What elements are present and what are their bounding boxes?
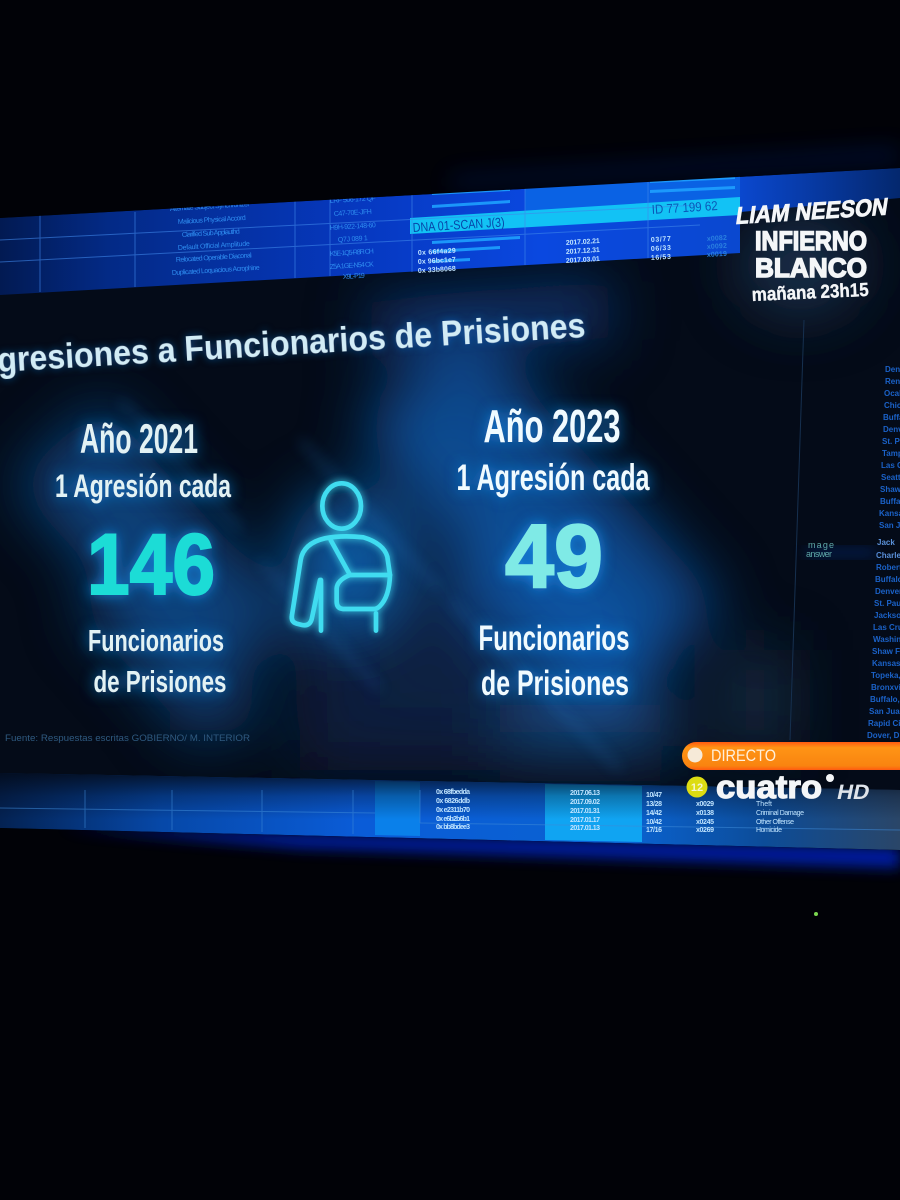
panel: bottom data band: 2017.06.13 (570, 790, 600, 797)
panel: top data band: Z5A 1GE-N54 CK (330, 261, 374, 271)
program promo: Liam Neeson: mañana 23h15 (751, 280, 869, 306)
label 2023: Funcionarios (478, 619, 630, 658)
year 2021: Año 2021 (80, 415, 198, 462)
panel: bottom data band: Criminal Damage (756, 810, 804, 817)
age rating badge: 12 (691, 782, 703, 794)
program promo: Liam Neeson: BLANCO (755, 253, 867, 283)
column: año 2023 (456, 400, 650, 703)
panel: top data band: 0x 96bc1e7 (418, 257, 456, 266)
panel: top data band: 2017.12.31 (566, 247, 600, 256)
panel: top data band: Default Official Amplitude (178, 241, 250, 252)
standby light (814, 912, 818, 916)
scan label: DNA 01-SCAN J(3) (412, 214, 505, 235)
screen glow on the surrounding wall (60, 150, 900, 868)
panel: bottom data band: Other Offense (756, 819, 794, 826)
column: año 2021 (55, 415, 231, 699)
panel: top data band: x0019 (707, 251, 727, 259)
sublabel 2021: de Prisiones (94, 664, 226, 699)
panel: right data column (790, 320, 900, 740)
panel: bottom data band: 2017.01.17 (570, 817, 600, 824)
panel: bottom data band: x0138 (696, 810, 714, 817)
panel: bottom data band: 10/47 (646, 792, 662, 799)
panel: bottom data band: 2017.01.13 (570, 825, 600, 832)
channel logo: cuatro HD: HD (835, 781, 872, 804)
light streaks (120, 400, 620, 770)
panel: bottom data band: 13/28 (646, 801, 662, 808)
year 2023: Año 2023 (484, 400, 620, 452)
panel: top data band: Clarified Sub Applauthd (182, 228, 240, 239)
panel: bottom data band: x0029 (696, 801, 714, 808)
panel: top data band: 2017.03.01 (566, 256, 600, 265)
panel: top data band: x0092 (707, 243, 727, 251)
panel: bottom data band: 14/42 (646, 810, 662, 817)
panel: top data band: 06/33 (651, 245, 671, 253)
panel: bottom data band: 0x 6826ddb (436, 798, 470, 805)
panel: top data band: 0x 33b8068 (418, 266, 456, 275)
panel: top data band (0, 168, 900, 295)
channel logo: cuatro HD: cuatro (716, 769, 822, 805)
program promo: Liam Neeson: INFIERNO (755, 226, 867, 256)
image caption fragment: mage (808, 540, 834, 550)
id label: ID 77 199 62 (651, 198, 718, 217)
panel: top data band: Alternate Subject Synchronizer (170, 201, 251, 213)
panel: top data band: x0082 (707, 235, 727, 243)
panel: bottom data band: 0x bb8bdee3 (436, 824, 470, 831)
frequency text 2023: 1 Agresión cada (456, 457, 650, 498)
image caption fragment (806, 540, 876, 559)
panel: bottom data band: x0269 (696, 827, 714, 834)
live badge: directo: DIRECTO (711, 746, 776, 765)
live badge: directo (682, 742, 900, 770)
panel: top data band: Relocated Operable Diaconal (176, 252, 252, 264)
panel: bottom data band: 10/42 (646, 819, 662, 826)
panel: top data band: 2017.02.21 (566, 238, 600, 247)
panel: top data band: Q7J 089 1 (338, 235, 368, 244)
number 49: 49 (505, 507, 603, 607)
age rating badge (686, 776, 708, 798)
panel: bottom data band: Theft (756, 801, 772, 808)
panel: bottom data band: 2017.01.31 (570, 808, 600, 815)
panel: bottom data band: 0x 68fbedda (436, 789, 470, 796)
panel: dark content background (0, 160, 900, 860)
source note: Fuente: Respuestas escritas GOBIERNO/ M. INTERIOR (5, 733, 251, 743)
panel: right data column: Jack (877, 538, 895, 547)
icon: person with arm sling (292, 483, 390, 631)
image caption fragment: answer (806, 549, 832, 559)
frequency text 2021: 1 Agresión cada (55, 468, 231, 504)
panel: top data band: C47-70E-JFH (334, 209, 372, 218)
panel: top data band: 0x 66f4a29 (418, 248, 456, 257)
title: gresiones a Funcionarios de Prisiones (0, 306, 586, 380)
panel: bottom data band: x0245 (696, 819, 714, 826)
panel: top data band: H9H-922-148-60 (330, 222, 376, 232)
panel: top data band: 16/53 (651, 254, 671, 262)
number 146: 146 (87, 517, 215, 613)
television screen (0, 160, 900, 860)
panel: bottom data band: Homicide (756, 827, 782, 834)
panel: top data band: 03/77 (651, 236, 671, 244)
panel: top data band: K5E-1Q5-R8R CH (330, 248, 374, 258)
label 2021: Funcionarios (88, 623, 224, 658)
panel: top data band: LRF 506-172 QF (330, 195, 376, 205)
panel: top data band: Duplicated Loquacious Acrophine (172, 265, 260, 277)
panel: top data band: X9L-P19 (343, 273, 365, 281)
panel: bottom data band: 2017.09.02 (570, 799, 600, 806)
panel: bottom data band: 0x e2311b70 (436, 807, 470, 814)
program promo: Liam Neeson: LIAM NEESON (734, 194, 890, 230)
panel: bottom data band: 17/16 (646, 827, 662, 834)
program promo: Liam Neeson (734, 194, 890, 306)
panel: bottom data band (0, 773, 900, 850)
panel: bottom data band: 0x e6b2b6b1 (436, 816, 470, 823)
panel: top data band: Malicious Physical Accord (178, 215, 246, 226)
sublabel 2023: de Prisiones (481, 664, 629, 703)
channel logo: cuatro HD (686, 774, 869, 799)
